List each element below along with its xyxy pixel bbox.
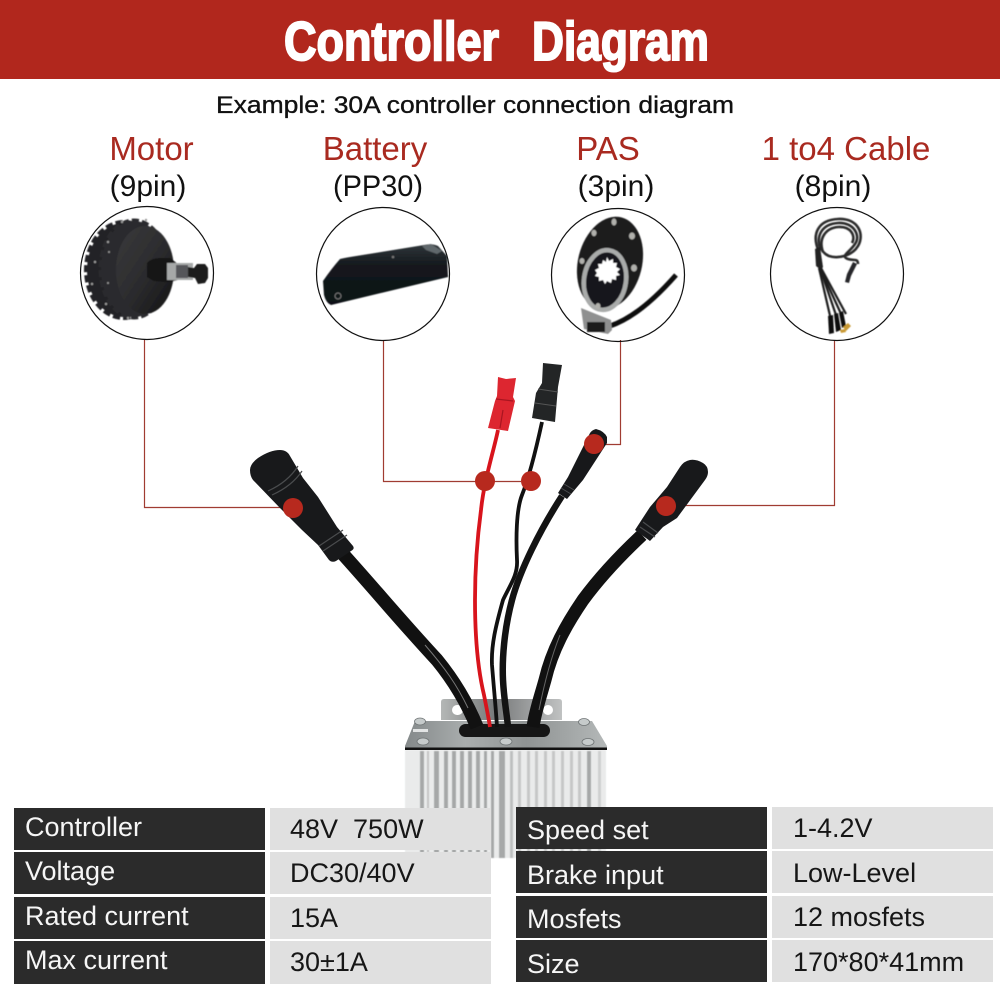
- title: [284, 10, 709, 72]
- row: rated current: Rated current: [25, 901, 189, 931]
- row: voltage: DC30/40V: [290, 858, 415, 888]
- spec table: left: [14, 808, 491, 984]
- row: brake input: Low-Level: [793, 858, 916, 888]
- row: voltage: [14, 852, 491, 894]
- row: brake input: [516, 851, 993, 893]
- top plate: [405, 721, 607, 749]
- panel: 1 to 4 cable: [762, 130, 930, 340]
- panel: motor: [80, 130, 214, 340]
- subtitle: Example: 30A controller connection diagram: [216, 92, 734, 119]
- motor pin count: (9pin): [110, 170, 186, 203]
- mounting holes: [452, 705, 553, 715]
- icon: hub motor: [80, 206, 214, 340]
- spec table: right: [516, 807, 993, 982]
- battery heading: Battery: [323, 130, 428, 167]
- row: mosfets: 12 mosfets: [793, 902, 925, 932]
- controller body: [405, 750, 606, 858]
- row: mosfets: Mosfets: [527, 904, 622, 934]
- PAS heading: PAS: [576, 130, 640, 167]
- row: max current: [14, 941, 491, 984]
- row: rated current: [14, 897, 491, 939]
- panel: PAS: [552, 130, 684, 342]
- red connector: [488, 377, 516, 431]
- motor heading: Motor: [109, 130, 194, 167]
- cable: 1 to 4: [533, 460, 708, 727]
- plug: [250, 450, 354, 562]
- mounting flange: [441, 699, 562, 720]
- cable: PAS: [503, 429, 607, 727]
- icon: PAS sensor disc: [552, 208, 684, 342]
- icon: battery pack: [316, 208, 450, 340]
- title: Diagram: [532, 10, 709, 72]
- controller box: [405, 699, 607, 858]
- row: max current: Max current: [25, 945, 168, 975]
- row: controller: [14, 808, 491, 850]
- PAS pin count: (3pin): [578, 170, 654, 203]
- row: speed set: [516, 807, 993, 849]
- cable: motor: [250, 450, 477, 727]
- cable pin count: (8pin): [795, 170, 871, 203]
- panel: battery: [316, 130, 450, 340]
- plug: [558, 429, 607, 499]
- cable: battery black: [492, 363, 562, 727]
- connector lines: [144, 340, 834, 508]
- screws: [414, 718, 594, 746]
- row: controller: 48V 750W: [290, 814, 424, 844]
- icon: 1 to 4 cable: [770, 208, 904, 340]
- row: speed set: 1-4.2V: [793, 813, 873, 843]
- row: brake input: Brake input: [527, 860, 664, 890]
- cable gasket: [459, 724, 550, 737]
- row: size: [516, 940, 993, 982]
- row: size: 170*80*41mm: [793, 947, 964, 977]
- title banner: [0, 0, 1000, 79]
- battery connector type: (PP30): [333, 170, 423, 203]
- cable: battery red: [475, 377, 516, 727]
- row: mosfets: [516, 896, 993, 938]
- connection dots: [283, 434, 676, 518]
- title: Controller: [284, 10, 499, 72]
- row: rated current: 15A: [290, 903, 338, 933]
- row: speed set: Speed set: [527, 815, 649, 845]
- black connector: [532, 363, 562, 422]
- plug: [635, 460, 708, 541]
- row: max current: 30±1A: [290, 947, 368, 977]
- cable heading: 1 to4 Cable: [762, 130, 930, 167]
- row: controller: Controller: [25, 812, 142, 842]
- row: size: Size: [527, 949, 580, 979]
- row: voltage: Voltage: [25, 856, 115, 886]
